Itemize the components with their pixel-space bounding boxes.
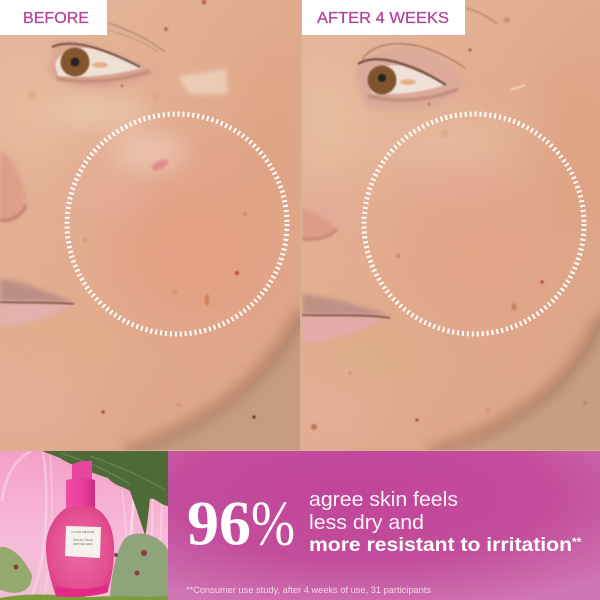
- skin spots: [28, 0, 256, 418]
- leaf: [42, 451, 168, 535]
- redness mark: [151, 158, 169, 172]
- panel: after photo: [275, 0, 600, 456]
- bottle label: GLOW RECIPE: [71, 530, 95, 534]
- ring: before treatment area: [67, 114, 287, 334]
- jaw shadow and neck: [430, 300, 600, 456]
- claim text: less dry and: [309, 511, 424, 534]
- claim text: [309, 488, 582, 556]
- label: before: [0, 0, 107, 35]
- bottle label: [65, 526, 101, 558]
- ground moss: [0, 594, 168, 600]
- eye: [355, 8, 525, 110]
- bottle label: PEPTIDE MASK: [73, 543, 93, 546]
- footnote: **Consumer use study, after 4 weeks of use, 31 participants: [186, 585, 431, 596]
- nose: [0, 150, 26, 221]
- label: after 4 weeks: AFTER 4 WEEKS: [317, 10, 449, 27]
- statistic: 96 percent: %: [251, 488, 295, 558]
- pale patch under eye: [178, 69, 228, 95]
- statistic: 96 percent: [187, 488, 295, 558]
- nose: [302, 208, 337, 239]
- cactus pads: [0, 534, 168, 597]
- lips: [0, 279, 76, 326]
- panel: product image: [0, 451, 168, 600]
- label: after 4 weeks: [302, 0, 465, 35]
- statistic: 96 percent: 96: [187, 488, 251, 558]
- jaw shadow and neck: [122, 306, 300, 450]
- lips: [302, 294, 392, 342]
- panel: statistic band: [168, 451, 600, 600]
- skin spots: [311, 17, 587, 430]
- bottle: [46, 461, 114, 597]
- claim text: agree skin feels: [309, 488, 458, 511]
- claim text: more resistant to irritation: [309, 534, 572, 556]
- claim text: **: [572, 535, 582, 549]
- ring: after treatment area: [364, 114, 584, 334]
- eye: [48, 23, 165, 88]
- label: before: BEFORE: [23, 10, 89, 27]
- panel: before photo: [0, 0, 310, 456]
- bottle label: PRICKLY PEAR: [73, 539, 93, 542]
- glass strands: [2, 452, 162, 597]
